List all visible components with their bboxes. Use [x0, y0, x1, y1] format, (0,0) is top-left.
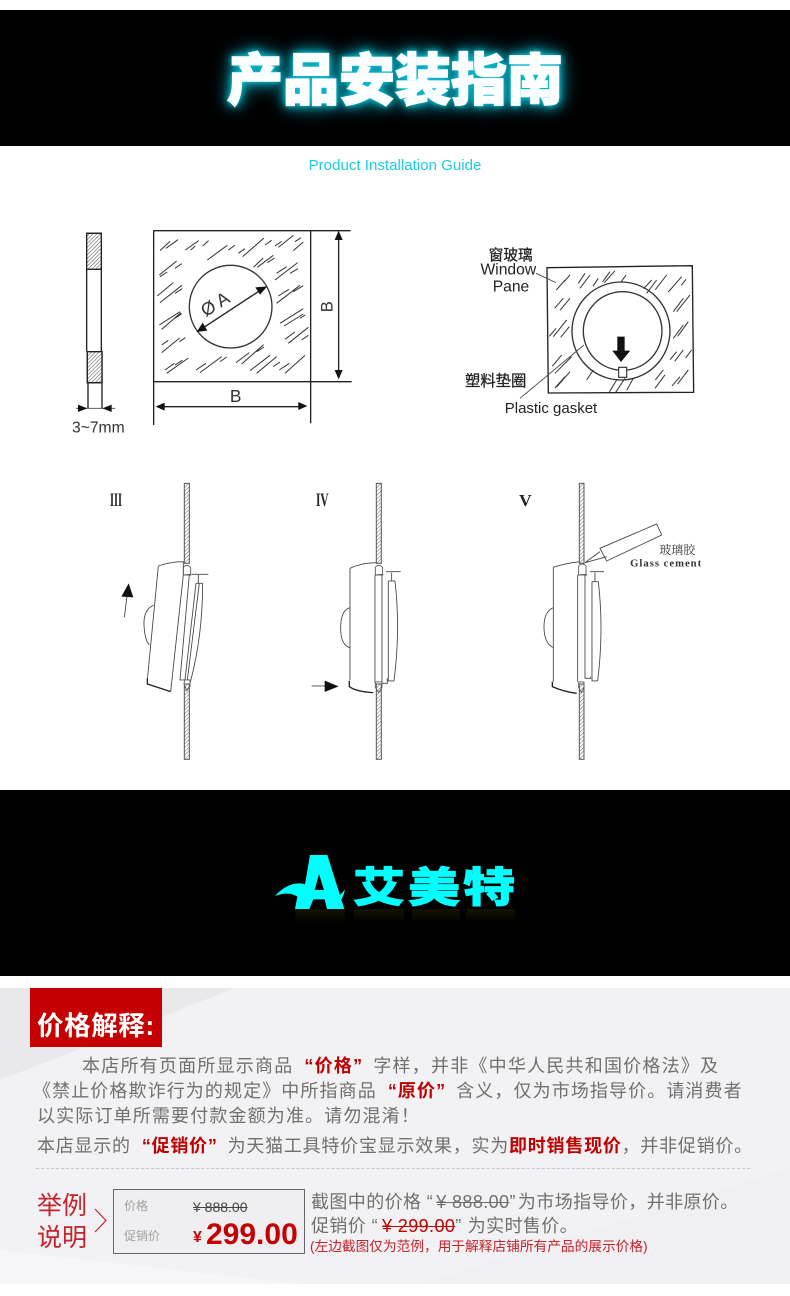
example label: 说明 — [37, 1224, 87, 1252]
example price box: 价格 — [124, 1199, 148, 1213]
logo: A mark and brand name — [275, 855, 515, 918]
logo: A mark and brand name: 艾美特 — [353, 864, 515, 911]
subtitle: Product Installation Guide — [309, 157, 481, 174]
leader lines — [520, 273, 584, 398]
diameter arrow — [200, 288, 263, 330]
icon: chevron — [94, 1208, 107, 1232]
example label: 举例 — [37, 1192, 87, 1220]
example explanation text: (左边截图仅为范例，用于解释店铺所有产品的展示价格) — [310, 1239, 648, 1254]
example price box: 299.00 — [206, 1218, 298, 1251]
diagram panel: dimensions and gasket — [72, 230, 702, 760]
diagram: window pane with plastic gasket — [465, 246, 694, 417]
diagram: glass pane with hole dimensions: B — [230, 386, 241, 406]
text block: price explanation paragraph: 本店显示的 “促销价” 为天猫工具特价宝显示效果，实为即时销售现价，并非促销价。 — [37, 1136, 753, 1156]
glass hatching — [157, 235, 308, 373]
step III: tilt device up: III — [110, 490, 122, 511]
dashed divider — [36, 1168, 750, 1169]
diagram: glass pane with hole dimensions: B — [318, 301, 337, 312]
text block: price explanation paragraph: 本店所有页面所显示商品 “价格” 字样，并非《中华人民共和国价格法》及 — [82, 1056, 719, 1076]
text block: price explanation paragraph: 《禁止价格欺诈行为的规定》中所指商品 “原价” 含义，仅为市场指导价。请消费者 — [33, 1081, 743, 1101]
example explanation text: 促销价 “¥ 299.00” 为实时售价。 — [311, 1216, 578, 1236]
step III: tilt device up — [110, 483, 208, 759]
cement tube — [585, 524, 662, 563]
panel background shading — [0, 988, 234, 1080]
step V: apply glass cement — [519, 483, 702, 759]
step V: apply glass cement: V — [519, 491, 532, 510]
diagram: window pane with plastic gasket: Pane — [493, 278, 530, 295]
step IV: press device in: IV — [316, 490, 329, 511]
text block: price explanation paragraph: 以实际订单所需要付款金额为准。请勿混淆！ — [37, 1106, 420, 1126]
diagram: glass pane with hole dimensions — [153, 230, 352, 425]
example explanation text — [310, 1192, 739, 1254]
text block: price explanation paragraph — [33, 1056, 753, 1156]
step V: apply glass cement: 玻璃胶 — [659, 542, 696, 557]
heading: price explanation — [30, 988, 162, 1047]
example label — [37, 1192, 107, 1252]
dimension B horizontal — [162, 405, 301, 409]
example price box: ¥ 888.00 — [193, 1199, 248, 1215]
diagram: side section 3~7mm: 3~7mm — [72, 420, 125, 437]
example price box: 促销价 — [124, 1229, 160, 1243]
logo band — [0, 790, 790, 976]
example price box — [113, 1189, 305, 1254]
panel: price explanation — [0, 988, 790, 1284]
logo reflection — [295, 909, 515, 924]
diagram: side section 3~7mm — [72, 233, 125, 437]
diagram: window pane with plastic gasket: Window — [480, 261, 537, 278]
example price box: ¥ — [193, 1229, 202, 1246]
title: 产品安装指南 — [227, 49, 563, 112]
step IV: press device in — [312, 483, 401, 759]
heading: price explanation: 价格解释: — [37, 1011, 155, 1041]
diagram: window pane with plastic gasket: 塑料垫圈 — [465, 373, 526, 390]
step V: apply glass cement: Glass cement — [630, 559, 702, 570]
header band — [0, 10, 790, 146]
dimension B vertical — [337, 237, 341, 373]
diagram: window pane with plastic gasket: Plastic gasket — [505, 400, 598, 417]
diagram: window pane with plastic gasket: 窗玻璃 — [489, 246, 533, 264]
example explanation text: 截图中的价格 “¥ 888.00”为市场指导价，并非原价。 — [311, 1192, 739, 1212]
diagram: glass pane with hole dimensions: Ø A — [197, 288, 233, 321]
